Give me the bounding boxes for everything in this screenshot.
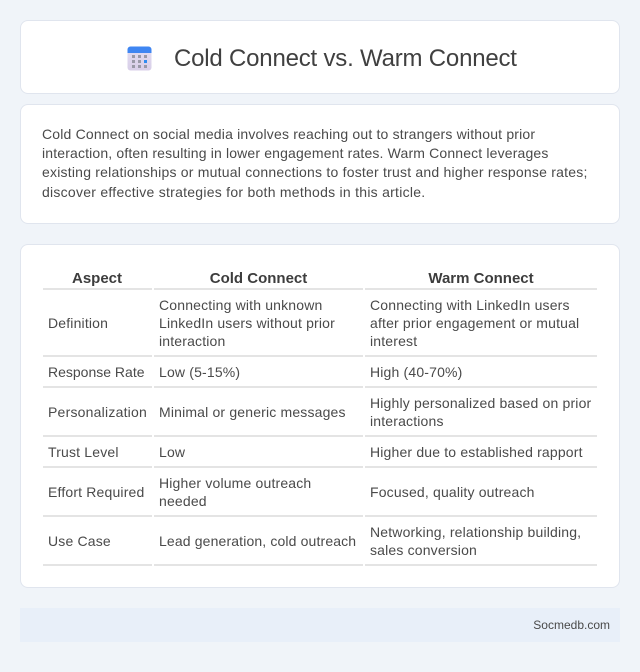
panel: comparison table: Focused, quality outreach (370, 484, 535, 500)
panel: comparison table: Connecting with LinkedIn users (370, 297, 570, 313)
panel: comparison table: interaction (159, 333, 225, 349)
intro paragraph: existing relationships or mutual connections to foster trust and higher response rates; (42, 164, 588, 180)
panel: title header (20, 20, 620, 94)
panel: comparison table: Higher due to established rapport (370, 444, 583, 460)
table header: Cold Connect: Cold Connect (210, 270, 307, 287)
panel: comparison table: interactions (370, 413, 444, 429)
panel: comparison table: Lead generation, cold outreach (159, 533, 356, 549)
footer source text: Socmedb.com (533, 618, 610, 632)
row: Personalization: Personalization (48, 404, 147, 420)
panel: comparison table: Minimal or generic messages (159, 404, 346, 420)
footer bar (20, 608, 620, 642)
panel: comparison table: Connecting with unknown (159, 297, 322, 313)
row: Response Rate: Response Rate (48, 364, 145, 380)
intro paragraph (42, 126, 588, 200)
panel: comparison table: Higher volume outreach (159, 475, 311, 491)
panel: comparison table: Low (159, 444, 185, 460)
panel: comparison table: after prior engagement or mutual (370, 315, 579, 331)
row: Trust Level: Trust Level (48, 444, 119, 460)
panel: comparison table: LinkedIn users without prior (159, 315, 335, 331)
row: Use Case: Use Case (48, 533, 111, 549)
panel: intro text (20, 104, 620, 224)
row: Effort Required: Effort Required (48, 484, 144, 500)
table header: Warm Connect: Warm Connect (428, 270, 534, 287)
intro paragraph: interaction, often resulting in lower engagement rates. Warm Connect leverages (42, 145, 548, 161)
panel: comparison table (20, 244, 620, 588)
panel: comparison table: Highly personalized based on prior (370, 395, 591, 411)
title: Cold Connect vs. Warm Connect (174, 45, 517, 72)
table header: Aspect: Aspect (72, 270, 122, 287)
panel: comparison table: sales conversion (370, 542, 477, 558)
panel: comparison table: High (40-70%) (370, 364, 462, 380)
panel: comparison table: needed (159, 493, 207, 509)
panel: comparison table: Low (5-15%) (159, 364, 240, 380)
intro paragraph: Cold Connect on social media involves reaching out to strangers without prior (42, 126, 535, 142)
intro paragraph: discover effective strategies for both methods in this article. (42, 184, 425, 200)
icon: calendar (128, 46, 152, 70)
panel: comparison table: Networking, relationship building, (370, 524, 581, 540)
row: Definition: Definition (48, 315, 108, 331)
panel: comparison table: interest (370, 333, 417, 349)
